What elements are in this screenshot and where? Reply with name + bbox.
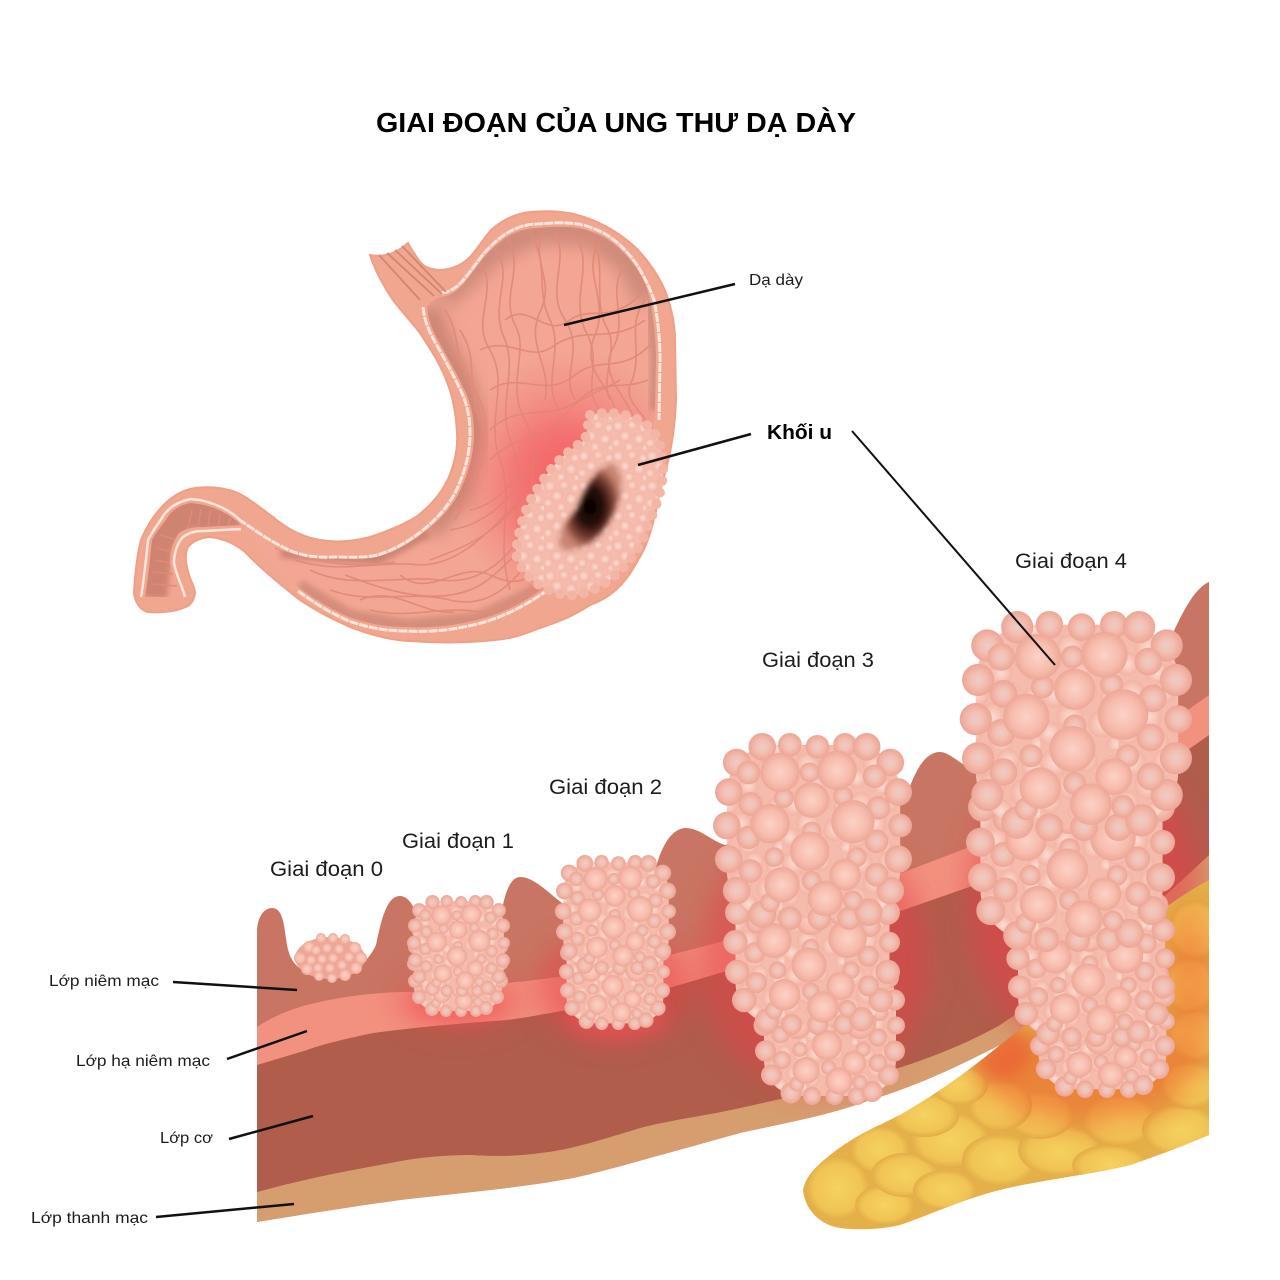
muscle layer	[257, 735, 1209, 1192]
label: mucosa: Lớp niêm mạc	[49, 973, 159, 990]
label: stage 1: Giai đoạn 1	[402, 830, 514, 853]
label: submucosa: Lớp hạ niêm mạc	[76, 1053, 210, 1070]
tumor stage 1	[407, 895, 510, 1023]
stomach wall cross-section	[257, 582, 1221, 1240]
label: stage 4: Giai đoạn 4	[1015, 550, 1127, 573]
tumor stage 3	[713, 733, 912, 1105]
label: tumor: Khối u	[767, 422, 832, 444]
fatty tissue	[800, 870, 1221, 1240]
tumor ulcer	[559, 463, 621, 550]
label: stage 3: Giai đoạn 3	[762, 649, 874, 672]
tumor stage 0	[294, 933, 367, 983]
stomach folds	[275, 230, 650, 614]
leader line: submucosa	[227, 1031, 307, 1059]
label: stage 0: Giai đoạn 0	[270, 858, 383, 881]
stomach inner frill	[441, 223, 660, 420]
leader line: tumor to stage 4	[852, 431, 1055, 665]
tumor glow	[500, 415, 620, 565]
leader line: mucosa	[173, 982, 297, 990]
label: serosa: Lớp thanh mạc	[31, 1210, 148, 1227]
stomach outer wall	[134, 211, 676, 642]
stomach illustration	[120, 200, 690, 650]
serosa layer	[257, 855, 1209, 1240]
title: GIAI ĐOẠN CỦA UNG THƯ DẠ DÀY	[376, 106, 856, 138]
submucosa layer	[257, 695, 1209, 1065]
label: muscle: Lớp cơ	[160, 1130, 214, 1147]
tumor stage 2	[555, 855, 676, 1040]
mucosa layer	[257, 582, 1209, 1222]
esophagus folds	[379, 246, 446, 300]
leader line: stomach	[564, 284, 735, 325]
tumor stage 4	[960, 611, 1192, 1098]
label: stomach: Dạ dày	[749, 272, 803, 289]
label: stage 2: Giai đoạn 2	[549, 776, 662, 799]
leader line: stomach tumor	[638, 434, 751, 465]
stomach inner cavity	[145, 226, 656, 628]
leader line: muscle	[229, 1116, 313, 1139]
stomach tumor	[516, 413, 663, 595]
leader line: serosa	[156, 1204, 294, 1217]
inflammation glows	[393, 750, 1203, 1090]
